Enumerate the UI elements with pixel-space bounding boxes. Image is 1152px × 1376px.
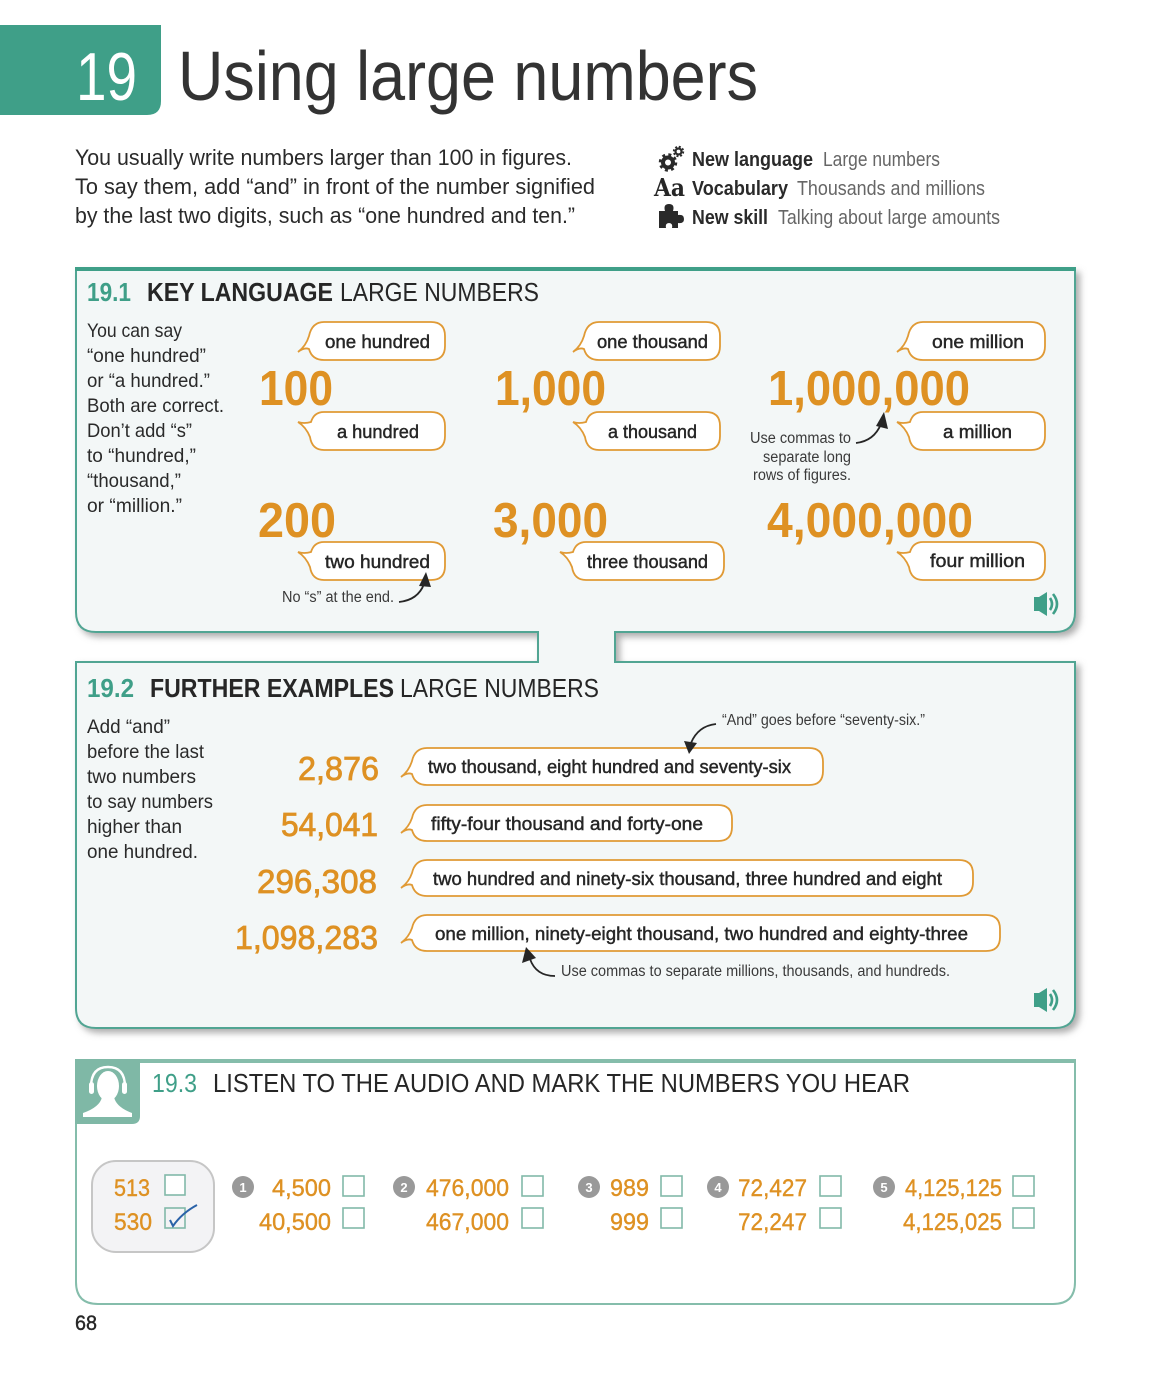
bubble: one hundred: one hundred [325, 331, 430, 352]
example answer: 513 [114, 1175, 150, 1202]
title: Using large numbers [178, 37, 758, 115]
row: 2,876 [298, 748, 823, 787]
heading 19.2 [87, 673, 599, 703]
explanation text: two numbers [87, 766, 196, 788]
explanation text [87, 716, 213, 863]
question 3: 3 [585, 1180, 593, 1195]
intro text: by the last two digits, such as “one hundred and ten.” [75, 203, 575, 228]
question 1: 4,500 [272, 1175, 331, 1202]
new language: New language [692, 149, 813, 171]
bubble: a thousand: a thousand [608, 421, 697, 442]
bubble: three thousand [560, 542, 724, 580]
question 5 [873, 1175, 1034, 1236]
new skill: Talking about large amounts [778, 207, 1000, 229]
heading 19.3: LISTEN TO THE AUDIO AND MARK THE NUMBERS YOU HEAR [213, 1068, 910, 1098]
question 2: 476,000 [426, 1175, 509, 1202]
heading 19.2: LARGE NUMBERS [400, 673, 599, 703]
icon: audio speaker [1034, 988, 1057, 1012]
bubble: four million [897, 542, 1045, 580]
question 4: 72,427 [738, 1175, 807, 1202]
question 5: 4,125,125 [905, 1175, 1002, 1202]
heading 19.1: KEY LANGUAGE [147, 277, 333, 307]
row: 1,098,283 [235, 915, 1000, 956]
panel: 19.1 key language [87, 277, 1057, 616]
note: commas [750, 430, 851, 484]
panel: 19.3 listening exercise [75, 1059, 1076, 1304]
explanation text: one hundred. [87, 841, 198, 863]
arrow: to comma [856, 412, 888, 443]
number: 3,000: 3,000 [493, 494, 608, 548]
row: 296,308: two hundred and ninety-six thousand, three hundred and eight [433, 868, 942, 889]
bubble: two hundred: two hundred [325, 551, 430, 572]
number: 1,000: 1,000 [495, 362, 606, 416]
explanation text: or “million.” [87, 495, 182, 517]
row: 2,876: two thousand, eight hundred and seventy-six [428, 756, 792, 777]
heading 19.2: FURTHER EXAMPLES [150, 673, 394, 703]
bubble: a hundred [298, 412, 445, 450]
question 3 [578, 1175, 682, 1236]
explanation text: before the last [87, 741, 205, 763]
heading 19.1: 19.1 [87, 277, 131, 307]
row: 54,041: fifty-four thousand and forty-one [431, 813, 703, 834]
number: 4,000,000: 4,000,000 [767, 494, 973, 548]
heading 19.3: 19.3 [152, 1068, 197, 1098]
note: and: “And” goes before “seventy-six.” [722, 712, 925, 729]
intro text: You usually write numbers larger than 100 in figures. [75, 145, 572, 170]
note: use commas: Use commas to separate millions, thousands, and hundreds. [561, 963, 950, 980]
row: 54,041: 54,041 [281, 806, 378, 843]
intro text [75, 145, 595, 228]
chapter number tab [0, 25, 161, 115]
icon: puzzle piece [659, 204, 684, 228]
explanation text: Both are correct. [87, 395, 224, 417]
number: 100: 100 [259, 362, 333, 416]
question 2: 2 [400, 1180, 408, 1195]
new skill: New skill [692, 207, 768, 229]
bubble: a million [897, 412, 1045, 450]
bubble: a hundred: a hundred [337, 421, 419, 442]
question 1: 40,500 [259, 1209, 331, 1236]
note: commas: Use commas to [750, 430, 851, 447]
summary list [653, 147, 1000, 229]
chapter number tab: 19 [76, 39, 137, 115]
example answer [92, 1161, 214, 1252]
question 3: 999 [610, 1209, 649, 1236]
explanation text: Don’t add “s” [87, 420, 192, 442]
question 4 [707, 1175, 841, 1236]
row: 1,098,283: one million, ninety-eight thousand, two hundred and eighty-three [435, 923, 968, 944]
vocabulary: Thousands and millions [797, 178, 985, 200]
bubble: one million: one million [932, 331, 1024, 352]
row: 296,308 [257, 860, 973, 900]
question 5: 5 [880, 1180, 888, 1195]
row: 54,041 [281, 805, 732, 843]
page number: 68 [75, 1312, 97, 1335]
bubble: four million: four million [930, 550, 1025, 571]
arrow: to two hundred [399, 572, 431, 602]
bubble: three thousand: three thousand [587, 551, 708, 572]
icon: Aa: Aa [653, 173, 685, 202]
example answer: 530 [114, 1209, 152, 1236]
new language: Large numbers [823, 149, 940, 171]
explanation text: or “a hundred.” [87, 370, 210, 392]
explanation text: to “hundred,” [87, 445, 196, 467]
new skill [692, 207, 1000, 229]
bubble: one thousand: one thousand [597, 331, 708, 352]
explanation text: higher than [87, 816, 182, 838]
vocabulary [692, 178, 985, 200]
panels 19.1 and 19.2 background [76, 269, 1075, 1028]
explanation text [87, 320, 224, 517]
arrow: to and [684, 724, 716, 754]
explanation text: Add “and” [87, 716, 170, 738]
question 5: 4,125,025 [903, 1209, 1002, 1236]
question 1 [232, 1175, 364, 1236]
row: 1,098,283: 1,098,283 [235, 919, 378, 956]
note: no s: No “s” at the end. [282, 589, 394, 606]
icon: listening figure [75, 1059, 140, 1124]
vocabulary: Vocabulary [692, 178, 789, 200]
new language [692, 149, 940, 171]
panel: 19.2 further examples [87, 673, 1057, 1012]
explanation text: You can say [87, 320, 182, 342]
question 1: 1 [239, 1180, 247, 1195]
question 3: 989 [610, 1175, 649, 1202]
icon: audio speaker [1034, 592, 1057, 616]
question 4: 4 [714, 1180, 722, 1195]
note: commas: rows of figures. [753, 467, 851, 484]
explanation text: to say numbers [87, 791, 213, 813]
heading 19.2: 19.2 [87, 673, 134, 703]
question 2: 467,000 [426, 1209, 509, 1236]
explanation text: “one hundred” [87, 345, 206, 367]
number: 200: 200 [258, 494, 336, 548]
bubble: one hundred [298, 322, 445, 360]
row: 296,308: 296,308 [257, 863, 377, 900]
bubble: two hundred [298, 542, 445, 580]
note: commas: separate long [763, 449, 851, 466]
number: 1,000,000: 1,000,000 [768, 362, 970, 416]
explanation text: “thousand,” [87, 470, 181, 492]
heading 19.1 [87, 277, 539, 307]
heading 19.1: LARGE NUMBERS [340, 277, 539, 307]
row: 2,876: 2,876 [298, 750, 379, 787]
intro text: To say them, add “and” in front of the number signified [75, 174, 595, 199]
icon: blue check mark [170, 1205, 197, 1226]
bubble: one thousand [573, 322, 720, 360]
question 4: 72,247 [738, 1209, 807, 1236]
icon: gears [660, 147, 683, 170]
arrow: to comma [522, 947, 555, 976]
question 2 [393, 1175, 543, 1236]
bubble: a thousand [573, 412, 720, 450]
bubble: one million [897, 322, 1045, 360]
bubble: a million: a million [943, 421, 1012, 442]
